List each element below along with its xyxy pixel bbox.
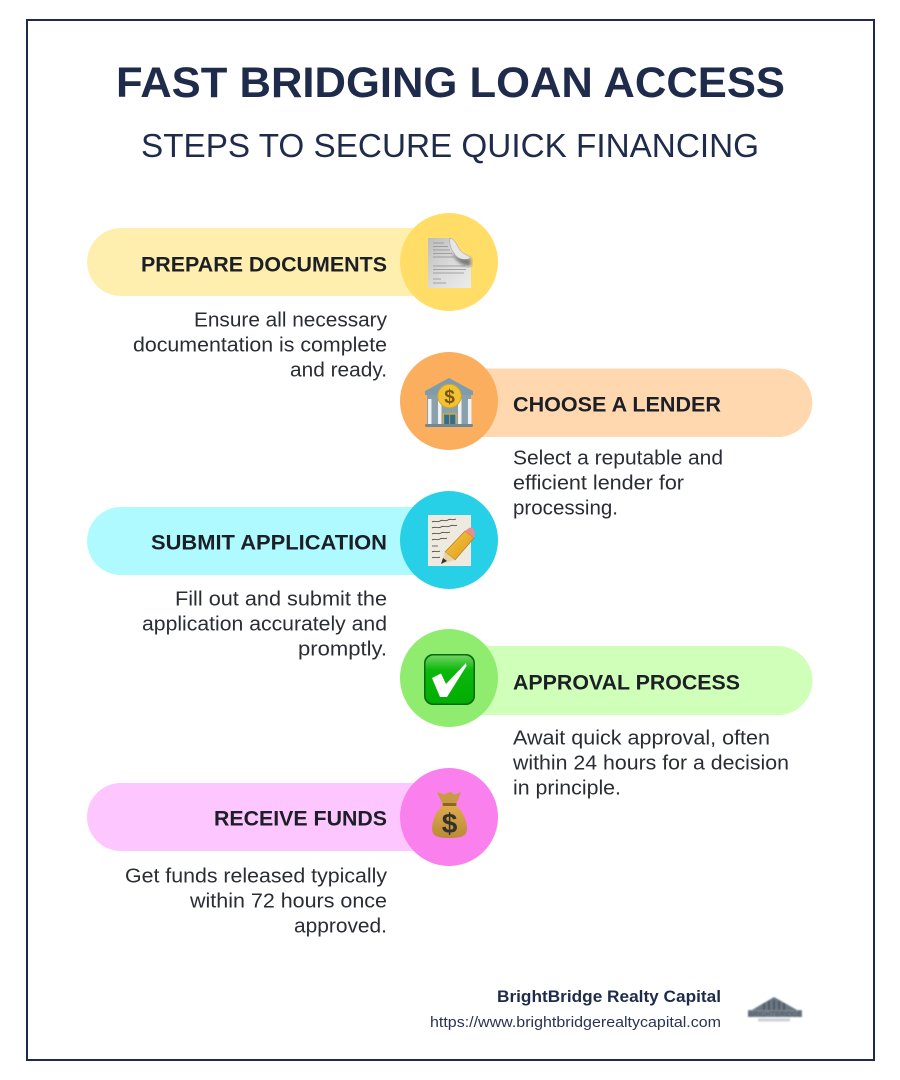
step 4 description [512, 726, 789, 800]
step 1 description: and ready. [290, 358, 387, 382]
step 3 description: promptly. [298, 638, 387, 660]
icon: memo and pencil [428, 515, 475, 566]
step 2 description [513, 446, 723, 520]
step 4 description: Await quick approval, often [513, 726, 770, 750]
step 2 heading: CHOOSE A LENDER [513, 394, 721, 416]
step 3 description: Fill out and submit the [175, 588, 387, 610]
step 5 heading: RECEIVE FUNDS [214, 808, 387, 830]
step 5 banner [87, 783, 430, 851]
step 3 circle [400, 491, 498, 589]
logo: BRIGHTBRIDGE [748, 1010, 802, 1018]
step 3 banner [87, 507, 430, 575]
step 1 banner [87, 228, 430, 296]
step 2: choose a lender [400, 352, 812, 520]
title: FAST BRIDGING LOAN ACCESS [116, 59, 785, 107]
step 5 description: approved. [294, 914, 387, 938]
step 4 description: within 24 hours for a decision [512, 752, 789, 774]
icon: money bag [432, 792, 467, 839]
icon: bank [425, 378, 473, 427]
step 5 description: within 72 hours once [189, 890, 387, 912]
step 2 description: processing. [513, 496, 618, 520]
subtitle: STEPS TO SECURE QUICK FINANCING [141, 128, 759, 165]
step 4 circle [400, 629, 498, 727]
step 3 heading: SUBMIT APPLICATION [151, 532, 387, 554]
step 4: approval process [400, 629, 813, 800]
logo [748, 997, 802, 1022]
step 5: receive funds [87, 768, 498, 938]
footer url: https://www.brightbridgerealtycapital.com [430, 1015, 721, 1031]
step 5 description: Get funds released typically [125, 864, 388, 888]
icon: document [428, 238, 471, 288]
footer company name: BrightBridge Realty Capital [497, 987, 721, 1006]
step 4 description: in principle. [513, 776, 621, 800]
step 2 description: efficient lender for [513, 472, 684, 494]
step 2 circle [400, 352, 498, 450]
step 1 heading: PREPARE DOCUMENTS [141, 254, 387, 276]
step 3 description [142, 588, 387, 660]
step 1 circle [400, 213, 498, 311]
step 3: submit application [87, 491, 498, 660]
step 1 description: documentation is complete [133, 334, 387, 356]
step 1 description: Ensure all necessary [194, 308, 388, 332]
step 1 description [133, 308, 388, 382]
step 2 description: Select a reputable and [513, 446, 723, 470]
step 1: prepare documents [87, 213, 498, 382]
step 3 description: application accurately and [142, 612, 387, 636]
icon: check mark [424, 654, 475, 705]
step 4 banner [470, 646, 813, 715]
step 5 description [125, 864, 388, 938]
step 2 banner [470, 368, 812, 437]
step 4 heading: APPROVAL PROCESS [513, 672, 740, 694]
icon: money bag: $ [442, 808, 458, 839]
step 5 circle [400, 768, 498, 866]
icon: bank: $ [444, 387, 455, 408]
